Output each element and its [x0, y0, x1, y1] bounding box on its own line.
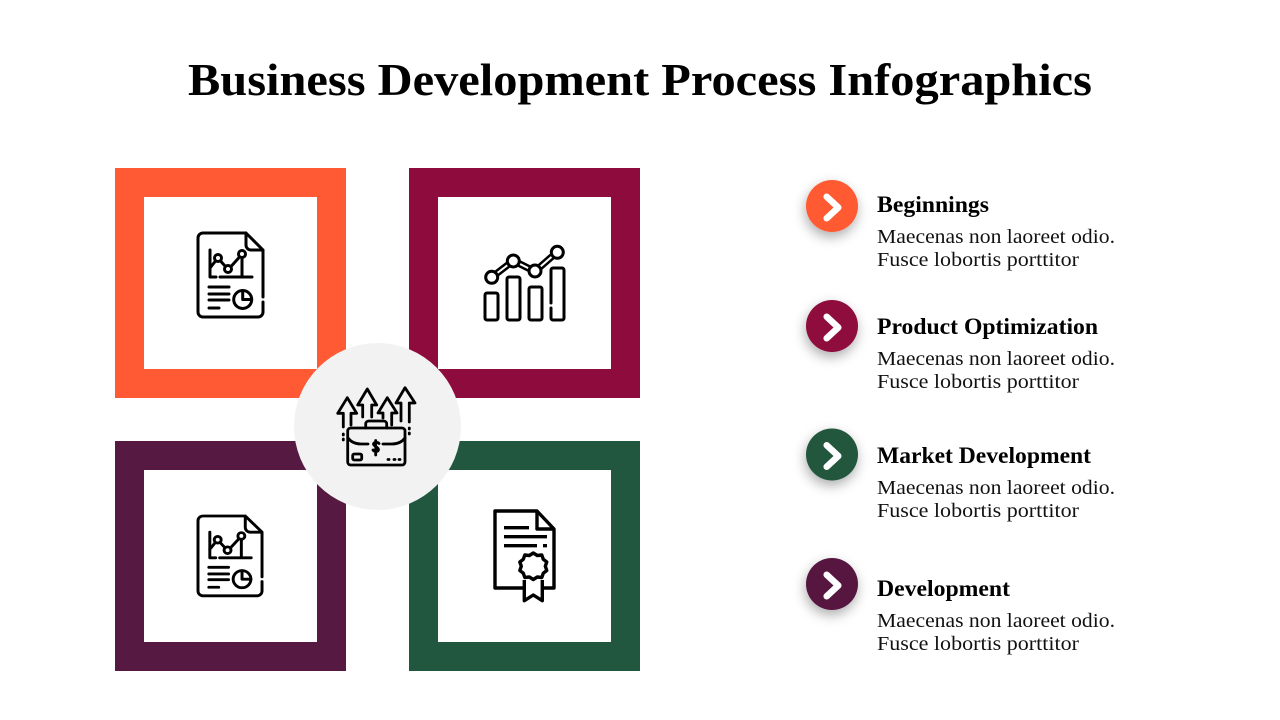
icon: briefcase with arrows: [338, 388, 415, 465]
icon: report document: [198, 233, 263, 317]
panel: purple square: [115, 441, 346, 671]
text: Development description: Fusce lobortis porttitor: [877, 633, 1079, 655]
icon: report document: [198, 516, 262, 596]
text: Beginnings description: Fusce lobortis porttitor: [877, 249, 1079, 271]
step 2: Product Optimization: [806, 300, 1115, 393]
bullet: maroon chevron: [806, 300, 858, 352]
text: Market Development description: Maecenas non laoreet odio.: [877, 477, 1115, 499]
panel: maroon square: [409, 168, 640, 398]
bullet: orange chevron: [806, 180, 858, 232]
text: Development description: Maecenas non laoreet odio.: [877, 610, 1115, 632]
panel: green square: [409, 441, 640, 671]
title: Business Development Process Infographics: [188, 54, 1092, 105]
icon: bar and line chart: [485, 246, 564, 320]
step 1: Beginnings: [806, 180, 1115, 271]
text: Product Optimization description: Fusce lobortis porttitor: [877, 371, 1079, 393]
panel: orange square: [115, 168, 346, 398]
text: Product Optimization description: [877, 348, 1115, 393]
text: Beginnings description: [877, 226, 1115, 271]
bullet: green chevron: [806, 428, 858, 480]
text: Market Development description: Fusce lobortis porttitor: [877, 500, 1079, 522]
text: Market Development description: [877, 477, 1115, 522]
icon: certificate: [495, 511, 554, 601]
bullet: purple chevron: [806, 558, 858, 610]
center circle: [294, 343, 461, 510]
heading: Beginnings: Beginnings: [877, 192, 989, 217]
heading: Development: Development: [877, 576, 1010, 601]
heading: Market Development: Market Development: [877, 443, 1091, 468]
step 3: Market Development: [806, 428, 1115, 522]
heading: Product Optimization: Product Optimization: [877, 314, 1098, 339]
text: Development description: [877, 610, 1115, 655]
text: Beginnings description: Maecenas non laoreet odio.: [877, 226, 1115, 248]
step 4: Development: [806, 558, 1115, 655]
text: Product Optimization description: Maecenas non laoreet odio.: [877, 348, 1115, 370]
